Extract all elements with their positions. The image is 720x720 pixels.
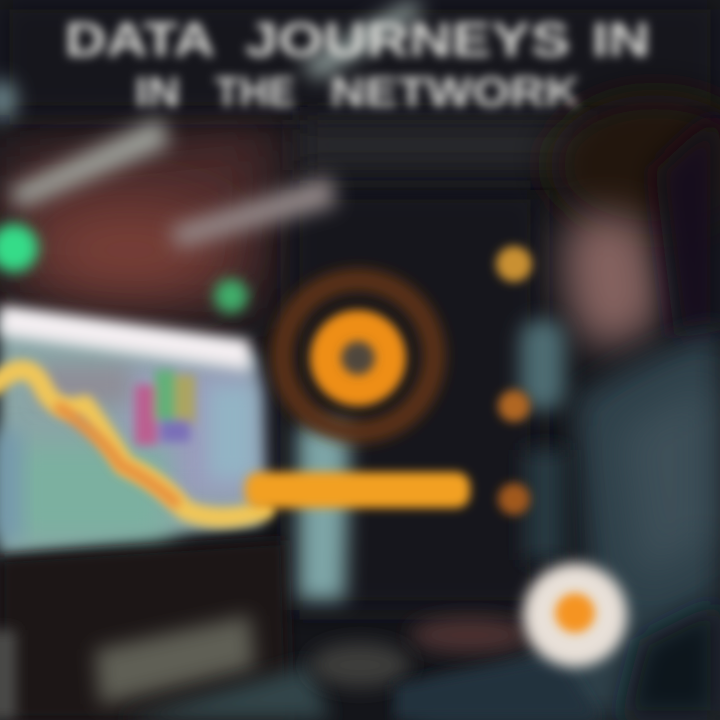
title: IN	[592, 14, 650, 67]
shirt	[400, 330, 720, 720]
monitor with chart	[0, 305, 265, 555]
orange progress bar	[245, 472, 470, 508]
hair	[550, 95, 720, 235]
monitor body	[0, 315, 262, 555]
target icon	[282, 280, 434, 432]
glass column	[298, 425, 350, 600]
title: THE	[215, 68, 295, 115]
desk	[0, 540, 330, 720]
person	[310, 95, 720, 720]
green indicator lights	[0, 224, 248, 313]
monitor top bar	[0, 305, 250, 370]
title	[65, 14, 650, 115]
orange side dots	[496, 246, 532, 515]
title: JOURNEYS	[245, 14, 570, 67]
reflected figure	[520, 320, 565, 410]
title: IN	[135, 68, 180, 115]
line chart	[0, 370, 265, 518]
coloured bars	[135, 370, 195, 445]
glowing orange button	[523, 563, 627, 667]
face	[564, 214, 662, 346]
ceiling light strips	[0, 0, 425, 248]
bottom right shadow	[620, 600, 720, 720]
title: DATA	[65, 14, 215, 67]
arm and hand	[410, 617, 530, 653]
hair side	[655, 110, 720, 340]
title: NETWORK	[330, 68, 580, 115]
